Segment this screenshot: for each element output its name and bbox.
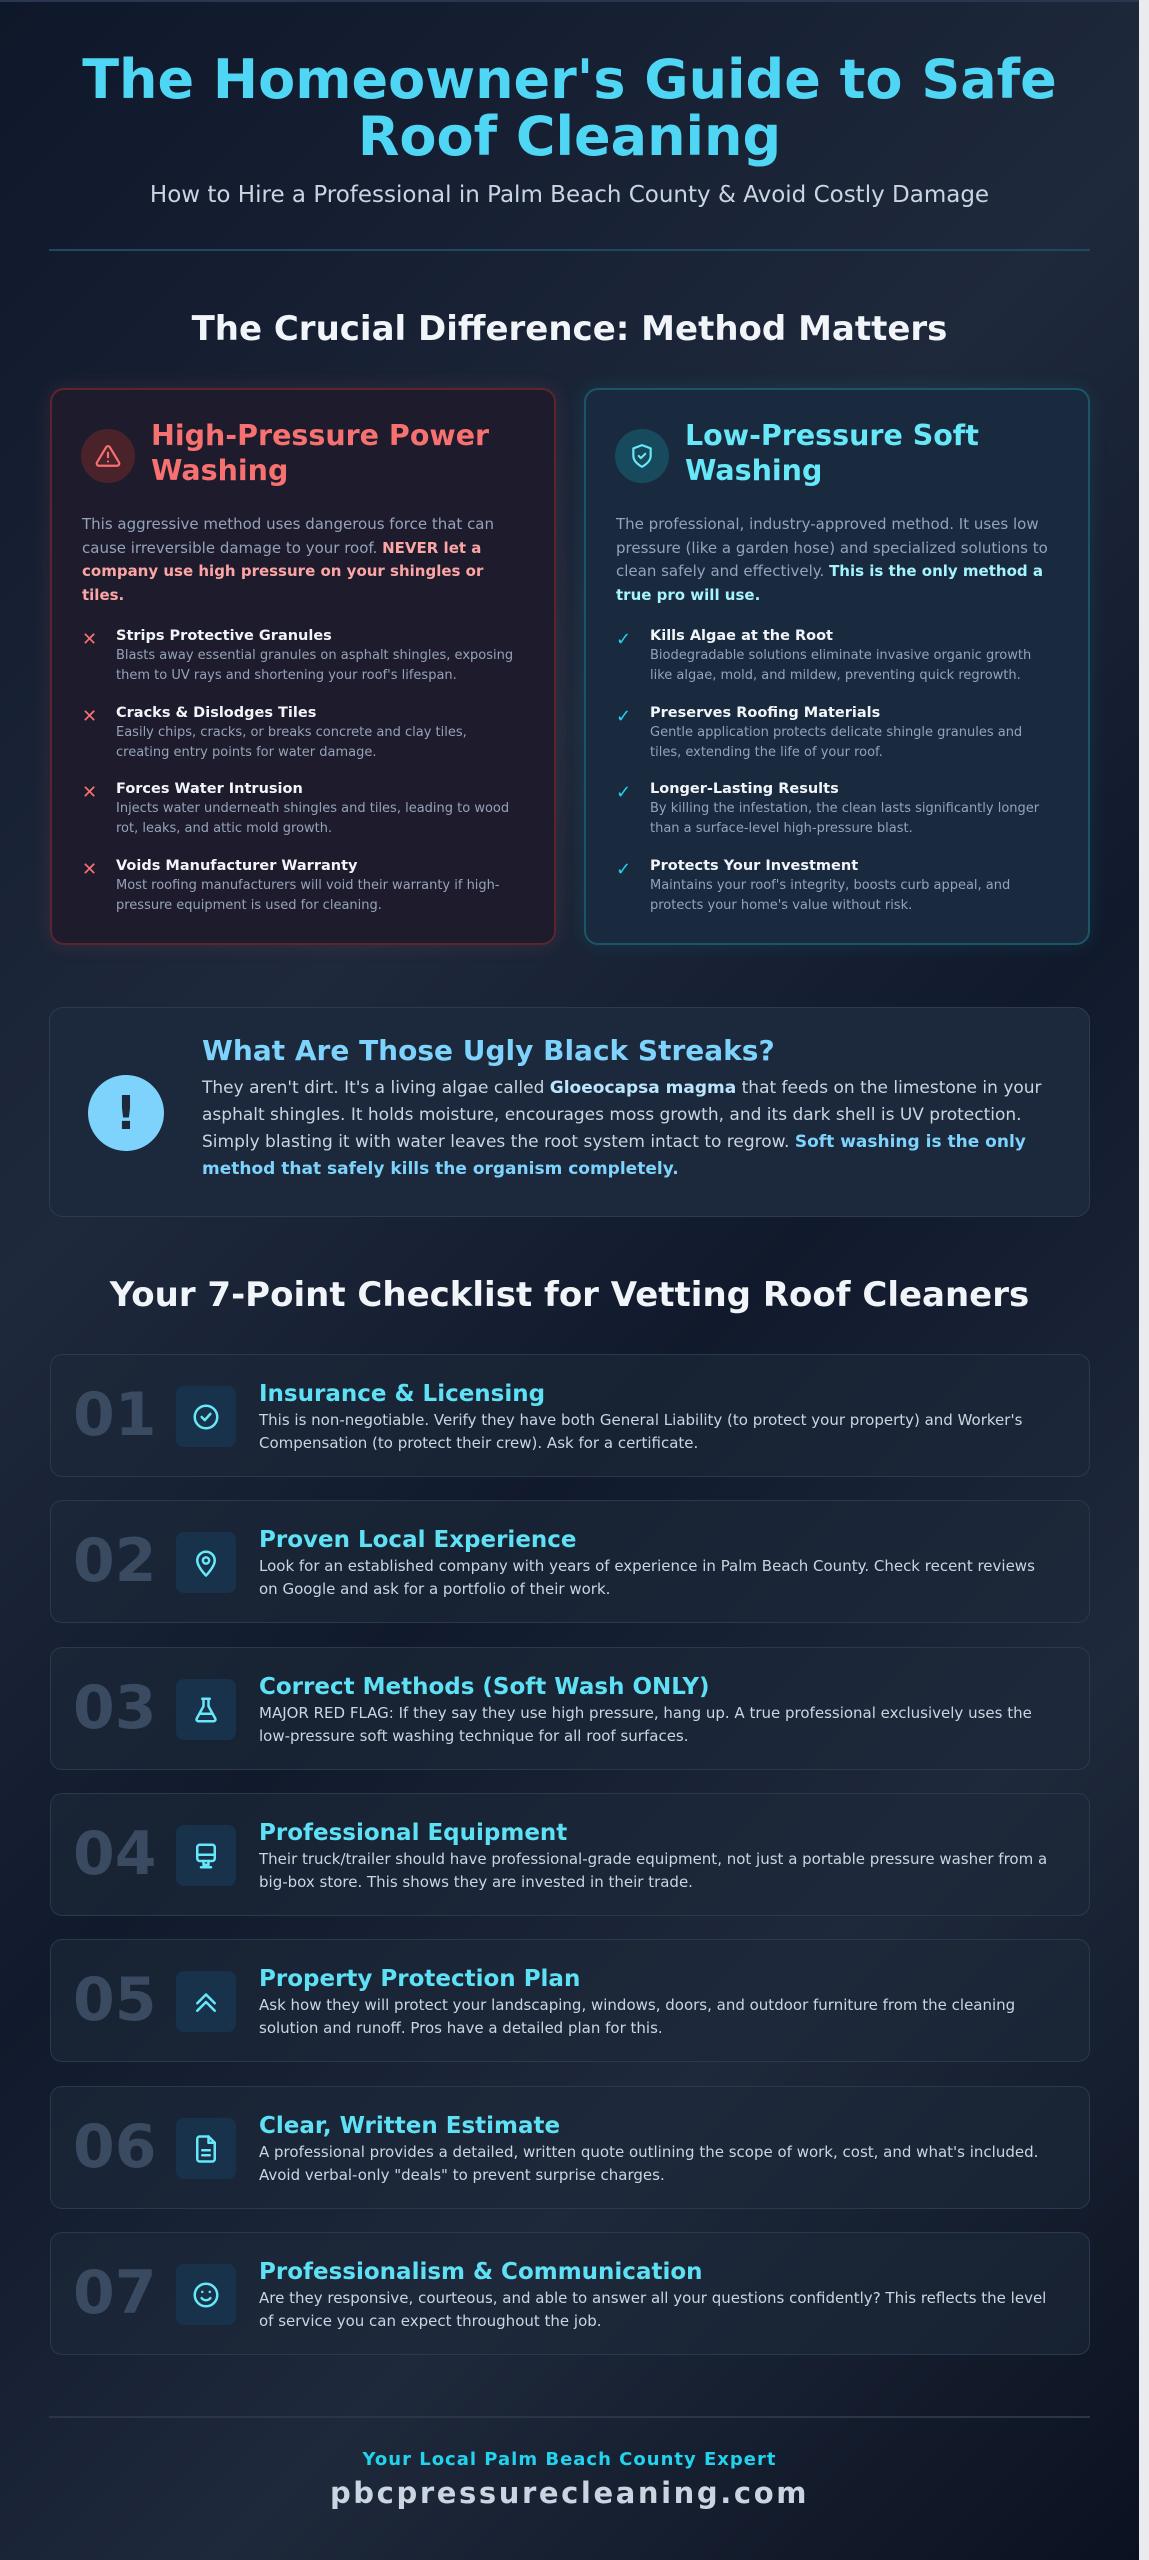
list item: Forces Water Intrusion bbox=[116, 781, 303, 797]
list item bbox=[82, 628, 513, 683]
checklist item 06: A professional provides a detailed, written quote outlining the scope of work, cost, and what's included. Avoid verbal-only "deals" to prevent surprise charges. bbox=[259, 2143, 1038, 2184]
checklist item 06 bbox=[50, 2086, 1090, 2209]
checklist item 01: 01 bbox=[73, 1380, 156, 1450]
text: The professional, industry-approved method. It uses low pressure (like a garden hose) and specialized solutions to clean safely and effectively. This is the only method a true pro will use. bbox=[616, 515, 1048, 604]
checklist item 02: Look for an established company with years of experience in Palm Beach County. Check recent reviews bbox=[259, 1557, 1035, 1575]
list item: Blasts away essential granules on asphalt shingles, exposing them to UV rays and shortening your roof's lifespan. bbox=[116, 648, 513, 683]
checklist item 05 bbox=[50, 1939, 1090, 2062]
footer tagline: Your Local Palm Beach County Expert bbox=[363, 2449, 776, 2470]
icon: exclamation: ! bbox=[116, 1086, 136, 1140]
list item: Longer-Lasting Results bbox=[650, 781, 839, 797]
checklist item 06: 06 bbox=[73, 2112, 156, 2182]
callout heading: What Are Those Ugly Black Streaks? bbox=[202, 1034, 775, 1067]
list item: By killing the infestation, the clean lasts significantly longer than a surface-level high-pressure blast. bbox=[650, 801, 1039, 836]
panel: high-pressure bbox=[50, 388, 556, 945]
checklist item 04: 04 bbox=[73, 1819, 156, 1889]
list item bbox=[616, 705, 1022, 760]
icon: flask bbox=[176, 1679, 236, 1740]
icon: document bbox=[176, 2118, 236, 2179]
icon: check circle bbox=[176, 1386, 236, 1447]
checklist item 04: Their truck/trailer should have professional-grade equipment, not just a portable pressure washer from a big-box store. This shows they are invested in their trade. bbox=[259, 1850, 1047, 1891]
callout: black streaks bbox=[49, 1007, 1090, 1217]
checklist item 07 bbox=[50, 2232, 1090, 2355]
icon: map pin bbox=[176, 1532, 236, 1593]
checklist item 02 bbox=[50, 1500, 1090, 1623]
heading: checklist: Your 7-Point Checklist for Vetting Roof Cleaners bbox=[110, 1275, 1029, 1315]
checklist item 02: 02 bbox=[73, 1526, 156, 1596]
checklist item 03: 03 bbox=[73, 1673, 156, 1743]
checklist item 01: Insurance & Licensing bbox=[259, 1381, 545, 1407]
list item: Injects water underneath shingles and tiles, leading to wood rot, leaks, and attic mold growth. bbox=[116, 801, 509, 836]
checklist item 02: Proven Local Experience bbox=[259, 1527, 577, 1553]
checklist item 05: Ask how they will protect your landscaping, windows, doors, and outdoor furniture from the cleaning solution and runoff. Pros have a detailed plan for this. bbox=[259, 1996, 1015, 2037]
checklist item 02: on Google and ask for a portfolio of their work. bbox=[259, 1580, 610, 1598]
subtitle: How to Hire a Professional in Palm Beach County & Avoid Costly Damage bbox=[150, 182, 989, 208]
icon: warning bbox=[81, 429, 135, 483]
checklist item 01 bbox=[50, 1354, 1090, 1477]
list item: ✕ bbox=[82, 629, 97, 650]
list item: Most roofing manufacturers will void their warranty if high-pressure equipment is used for cleaning. bbox=[116, 878, 500, 913]
icon: shield bbox=[615, 429, 669, 483]
icon: smile bbox=[176, 2264, 236, 2325]
title: The Homeowner's Guide to Safe bbox=[82, 48, 1057, 111]
footer domain: pbcpressurecleaning.com bbox=[330, 2476, 809, 2510]
checklist item 05: 05 bbox=[73, 1965, 156, 2035]
checklist item 03: Correct Methods (Soft Wash ONLY) bbox=[259, 1674, 710, 1700]
checklist item 07: of service you can expect throughout the job. bbox=[259, 2312, 602, 2330]
checklist item 07: 07 bbox=[73, 2258, 156, 2328]
checklist item 04: Professional Equipment bbox=[259, 1820, 567, 1846]
list item: Kills Algae at the Root bbox=[650, 628, 833, 644]
icon: exclamation bbox=[88, 1075, 164, 1151]
checklist item 04 bbox=[50, 1793, 1090, 1916]
checklist item 07: Are they responsive, courteous, and able to answer all your questions confidently? This reflects the level bbox=[259, 2289, 1046, 2307]
list item: Maintains your roof's integrity, boosts curb appeal, and protects your home's value without risk. bbox=[650, 878, 1010, 913]
list item bbox=[616, 628, 1031, 683]
text: This aggressive method uses dangerous force that can cause irreversible damage to your roof. NEVER let a company use high pressure on your shingles or tiles. bbox=[82, 515, 494, 604]
checklist item 03: MAJOR RED FLAG: If they say they use high pressure, hang up. A true professional exclusively uses the bbox=[259, 1704, 1032, 1722]
list item: ✓ bbox=[616, 706, 631, 727]
heading: Low-Pressure Soft Washing bbox=[685, 419, 979, 487]
list item: ✓ bbox=[616, 859, 631, 880]
title: Roof Cleaning bbox=[358, 105, 781, 168]
list item bbox=[82, 858, 500, 913]
icon: equipment bbox=[176, 1825, 236, 1886]
list item: Voids Manufacturer Warranty bbox=[116, 858, 357, 874]
list item: ✕ bbox=[82, 782, 97, 803]
panel: soft wash bbox=[584, 388, 1090, 945]
list item: Gentle application protects delicate shingle granules and tiles, extending the life of your roof. bbox=[650, 725, 1022, 760]
list item: ✕ bbox=[82, 859, 97, 880]
checklist item 05: Property Protection Plan bbox=[259, 1966, 580, 1992]
icon: chevrons up bbox=[176, 1971, 236, 2032]
list item: Cracks & Dislodges Tiles bbox=[116, 705, 316, 721]
list item: ✕ bbox=[82, 706, 97, 727]
checklist item 06: Clear, Written Estimate bbox=[259, 2113, 560, 2139]
list item: Preserves Roofing Materials bbox=[650, 705, 880, 721]
list item: ✓ bbox=[616, 629, 631, 650]
title bbox=[82, 48, 1057, 168]
checklist item 03 bbox=[50, 1647, 1090, 1770]
checklist item 07: Professionalism & Communication bbox=[259, 2259, 703, 2285]
checklist item 03: low-pressure soft washing technique for all roof surfaces. bbox=[259, 1727, 688, 1745]
checklist item 01: This is non-negotiable. Verify they have both General Liability (to protect your property) and Worker's Compensation (to protect their crew). Ask for a certificate. bbox=[259, 1411, 1022, 1452]
list item: Easily chips, cracks, or breaks concrete and clay tiles, creating entry points for water damage. bbox=[116, 725, 467, 760]
list item: ✓ bbox=[616, 782, 631, 803]
list item bbox=[82, 781, 509, 836]
list item bbox=[616, 858, 1010, 913]
list item: Protects Your Investment bbox=[650, 858, 858, 874]
list item bbox=[616, 781, 1040, 836]
heading: method matters: The Crucial Difference: Method Matters bbox=[192, 309, 947, 349]
callout text: They aren't dirt. It's a living algae called Gloeocapsa magma that feeds on the limestone in your asphalt shingles. It holds moisture, encourages moss growth, and its dark shell is UV protection. Simply blasting it with water leaves the root system intact to regrow. Soft washing is the only method that safely kills the organism completely. bbox=[202, 1078, 1042, 1179]
heading: High-Pressure Power Washing bbox=[151, 419, 489, 487]
list item bbox=[82, 705, 467, 760]
list item: Biodegradable solutions eliminate invasive organic growth like algae, mold, and mildew, preventing quick regrowth. bbox=[650, 648, 1031, 683]
list item: Strips Protective Granules bbox=[116, 628, 332, 644]
